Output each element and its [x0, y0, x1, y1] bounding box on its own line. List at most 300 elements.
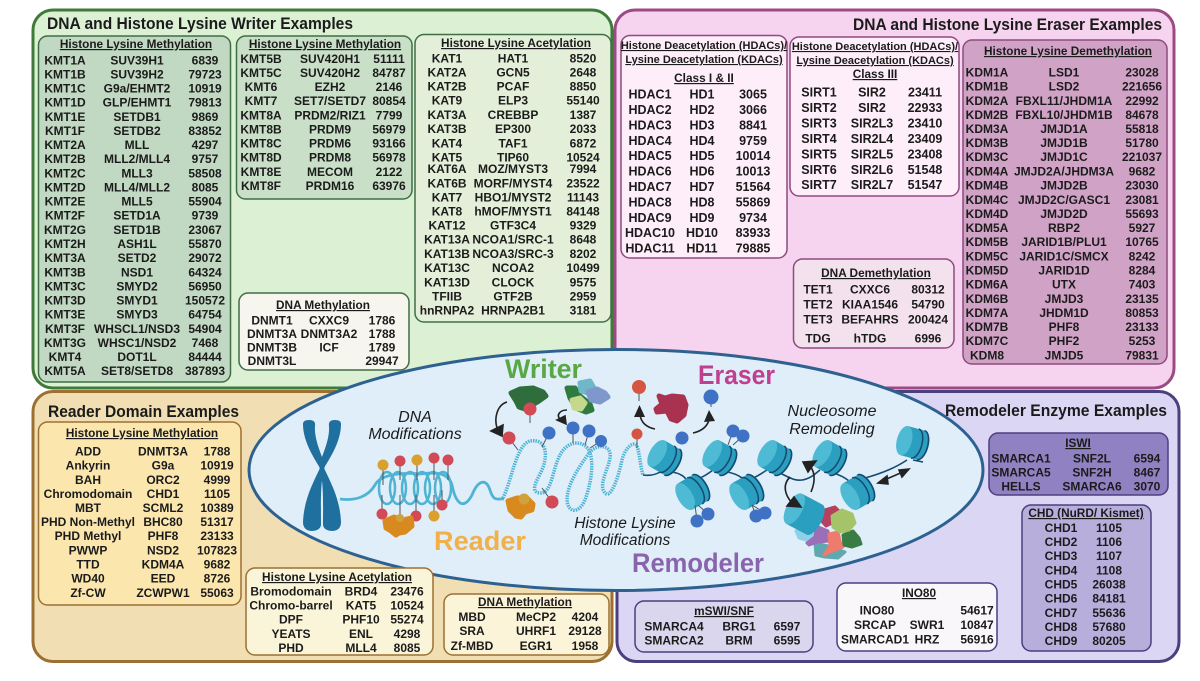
table: histone lysine demethylation: FBXL11/JHDM1A	[1016, 94, 1113, 108]
table: HDAC class III: 51548	[908, 163, 942, 177]
table: reader histone lysine acetylation: Chromo-barrel	[249, 598, 333, 612]
table: histone lysine methylation 1: WHSCL1/NSD3	[94, 322, 180, 336]
table: HDAC class I and II: HDAC5	[628, 149, 672, 163]
table: mSWI/SNF: mSWI/SNF	[694, 604, 754, 618]
table: histone lysine methylation 1: 55904	[188, 195, 222, 209]
table: HDAC class I and II: HD5	[689, 149, 715, 163]
table: HDAC class III: SIR2L7	[851, 178, 893, 192]
table: histone lysine methylation 1: 84444	[188, 350, 222, 364]
table: mSWI/SNF: 6595	[774, 634, 801, 648]
heading: reader: Reader Domain Examples	[48, 402, 239, 421]
table: histone lysine methylation 1: KMT2E	[45, 195, 85, 209]
table: histone lysine demethylation: 55693	[1125, 207, 1159, 221]
icon: remodeler complex	[779, 490, 861, 558]
table: HDAC class III: 51547	[908, 178, 942, 192]
table: mSWI/SNF: BRM	[725, 634, 753, 648]
panel: reader examples	[33, 392, 612, 662]
table: HDAC class III: 23411	[908, 86, 942, 100]
table: histone lysine acetylation writer: 10499	[566, 261, 600, 275]
table: histone lysine methylation 2: 63976	[372, 179, 406, 193]
table: HDAC class III: SIRT3	[801, 116, 837, 130]
table: DNA methylation writer: 1788	[369, 327, 396, 341]
table: histone lysine methylation 2: 56978	[372, 151, 406, 165]
table: reader DNA methylation: UHRF1	[516, 624, 556, 638]
table: histone lysine demethylation: KDM4B	[966, 178, 1009, 192]
table: reader histone lysine methylation: 51317	[200, 515, 234, 529]
table: CHD: 84181	[1092, 592, 1126, 606]
table: histone lysine acetylation writer: KAT3B	[427, 122, 467, 136]
table: histone lysine acetylation writer: KAT2A	[427, 66, 467, 80]
table: histone lysine methylation 2: KMT8E	[241, 165, 281, 179]
table: histone lysine demethylation: KDM6B	[966, 292, 1009, 306]
table: histone lysine methylation 2: KMT8C	[240, 136, 282, 150]
table: ISWI: SNF2L	[1073, 452, 1111, 466]
table: histone lysine acetylation writer: NCOA2	[492, 261, 534, 275]
table: reader histone lysine methylation: 10389	[200, 501, 234, 515]
table: DNA methylation writer: 1786	[369, 314, 396, 328]
icon: eraser protein with arrows	[632, 380, 718, 433]
table: histone lysine demethylation: JHDM1D	[1039, 306, 1089, 320]
table: HDAC class I and II: HDAC6	[628, 164, 672, 178]
table: histone lysine demethylation: KDM2A	[966, 94, 1009, 108]
table: INO80: 56916	[960, 632, 994, 646]
table: CHD: CHD1	[1045, 521, 1078, 535]
table: DNA demethylation: TET3	[803, 312, 833, 326]
table: reader histone lysine methylation: 1105	[204, 487, 230, 501]
table: HDAC class I and II: HDAC8	[628, 196, 672, 210]
table: HDAC class I and II: 3065	[739, 88, 767, 102]
table: histone lysine demethylation: JMJD1B	[1040, 136, 1088, 150]
table: reader histone lysine acetylation: 8085	[394, 641, 421, 655]
icon: nucleosome chain	[643, 424, 932, 513]
table: histone lysine acetylation writer: KAT8	[432, 204, 463, 218]
table: INO80: SWR1	[910, 618, 945, 632]
table: DNA demethylation: KIAA1546	[842, 298, 898, 312]
heading: writer: DNA and Histone Lysine Writer Examples	[47, 14, 353, 33]
table: histone lysine acetylation writer: CREBBP	[488, 108, 538, 122]
table: HDAC class I and II: Lysine Deacetylation (KDACs)	[625, 54, 783, 66]
table: histone lysine methylation 1: SETD1B	[113, 223, 161, 237]
table: histone lysine methylation 1: KMT3C	[44, 279, 86, 293]
label: nucleosome remodeling: Nucleosome	[788, 403, 877, 420]
table: histone lysine acetylation writer: 3181	[570, 304, 597, 318]
table: HDAC class III: Class III	[853, 67, 897, 81]
table: histone lysine methylation 2: 84787	[372, 66, 406, 80]
table: reader histone lysine methylation: 55063	[200, 586, 234, 600]
table: histone lysine acetylation writer: 2033	[570, 122, 597, 136]
table: histone lysine methylation 1: 8085	[192, 180, 219, 194]
table: CHD: 1107	[1096, 549, 1122, 563]
table: histone lysine methylation 1: ASH1L	[117, 237, 157, 251]
table: HDAC class I and II: HDAC9	[628, 211, 672, 225]
table: HDAC class I and II: HD9	[689, 211, 715, 225]
table: histone lysine methylation 1: GLP/EHMT1	[103, 96, 172, 110]
table: reader histone lysine acetylation: 23476	[390, 584, 424, 598]
table: HDAC class I and II: HDAC2	[628, 103, 672, 117]
table: histone lysine methylation 1: SETDB1	[113, 110, 161, 124]
label: writer: Writer	[505, 354, 582, 384]
table: histone lysine demethylation: 5927	[1129, 221, 1156, 235]
table: histone lysine methylation 2: PRDM6	[309, 136, 351, 150]
table: histone lysine methylation 2: KMT8B	[240, 122, 282, 136]
table: reader histone lysine methylation: ADD	[75, 444, 101, 458]
table: histone lysine demethylation: JMJD2D	[1040, 207, 1088, 221]
table: histone lysine methylation 1: KMT2H	[44, 237, 86, 251]
table: histone lysine methylation 1	[38, 36, 230, 382]
table: histone lysine methylation 1: 10919	[188, 82, 222, 96]
table: DNA methylation writer: 29947	[365, 354, 399, 368]
table: histone lysine methylation 1: SET8/SETD8	[101, 364, 173, 378]
table: histone lysine acetylation writer: KAT5	[432, 150, 463, 164]
table: histone lysine acetylation writer: Histone Lysine Acetylation	[441, 36, 591, 50]
table: histone lysine demethylation: LSD2	[1049, 80, 1080, 94]
table: reader histone lysine acetylation: BRD4	[345, 584, 378, 598]
table: histone lysine acetylation writer: 2648	[570, 66, 597, 80]
table: histone lysine methylation 1: KMT3D	[44, 294, 86, 308]
table: mSWI/SNF: SMARCA2	[644, 634, 704, 648]
table: CHD	[1022, 505, 1151, 651]
table: histone lysine methylation 1: SUV39H2	[110, 67, 164, 81]
table: CHD: CHD4	[1045, 564, 1078, 578]
table: histone lysine methylation 2: 93166	[372, 136, 406, 150]
table: HDAC class III: SIR2	[858, 101, 886, 115]
table: ISWI	[989, 433, 1168, 495]
table: reader DNA methylation: Zf-MBD	[451, 639, 494, 653]
table: reader histone lysine methylation: KDM4A	[142, 558, 185, 572]
table: histone lysine demethylation: KDM3C	[966, 150, 1009, 164]
table: histone lysine methylation 1: 23067	[188, 223, 222, 237]
table: histone lysine methylation 2: KMT5C	[240, 66, 282, 80]
table: HDAC class III: SIRT6	[801, 163, 837, 177]
table: HDAC class III: SIR2L5	[851, 148, 893, 162]
table: reader histone lysine methylation: 4999	[204, 473, 231, 487]
table: histone lysine demethylation: 22992	[1125, 94, 1159, 108]
table: ISWI: SNF2H	[1072, 466, 1112, 480]
icon: chromosome	[303, 420, 341, 531]
table: histone lysine methylation 1: 387893	[185, 364, 225, 378]
table: reader histone lysine methylation: PHD Non-Methyl	[41, 515, 135, 529]
table: histone lysine acetylation writer: 55140	[566, 94, 600, 108]
table: histone lysine acetylation writer: EP300	[495, 122, 531, 136]
table: CHD: CHD8	[1045, 620, 1078, 634]
table: histone lysine acetylation writer: ELP3	[498, 94, 528, 108]
table: histone lysine acetylation writer: TAF1	[498, 136, 528, 150]
table: histone lysine demethylation: RBP2	[1048, 221, 1080, 235]
label: DNA modifications	[368, 409, 462, 443]
table: histone lysine methylation 1: KMT2F	[45, 209, 85, 223]
table: histone lysine demethylation: 8284	[1129, 264, 1156, 278]
table: histone lysine demethylation: 23030	[1125, 178, 1159, 192]
table: histone lysine acetylation writer: KAT2B	[427, 80, 467, 94]
label: histone lysine modifications: Histone Lysine	[574, 515, 676, 532]
table: histone lysine methylation 2: KMT7	[245, 94, 278, 108]
table: histone lysine demethylation: JMJD2B	[1040, 178, 1088, 192]
table: histone lysine methylation 1: 58508	[188, 166, 222, 180]
table: histone lysine acetylation writer: 8520	[570, 52, 597, 66]
table: histone lysine demethylation: KDM7B	[966, 320, 1009, 334]
label: nucleosome remodeling	[788, 403, 877, 438]
table: histone lysine methylation 1: SMYD1	[116, 294, 158, 308]
table: reader histone lysine methylation: G9a	[152, 458, 175, 472]
table: histone lysine acetylation writer: MOZ/MYST3	[478, 162, 548, 176]
table: INO80: INO80	[902, 586, 936, 600]
panel: remodeler examples	[617, 392, 1179, 662]
table: INO80: SMARCAD1	[841, 632, 909, 646]
table: ISWI: ISWI	[1065, 436, 1091, 450]
table: DNA demethylation: TDG	[805, 332, 831, 346]
table: CHD: 80205	[1092, 634, 1126, 648]
table: ISWI: 3070	[1134, 480, 1161, 494]
table: histone lysine methylation 1: 9869	[192, 110, 219, 124]
table: histone lysine demethylation: JMJD2A/JHDM3A	[1014, 164, 1114, 178]
table: HDAC class III: 22933	[908, 101, 942, 115]
table: reader histone lysine acetylation: PHD	[278, 641, 304, 655]
table: reader histone lysine acetylation: MLL4	[345, 641, 377, 655]
table: INO80: SRCAP	[854, 618, 896, 632]
table: HDAC class I and II: HD6	[689, 164, 715, 178]
table: ISWI: 8467	[1134, 466, 1161, 480]
table: reader histone lysine acetylation: YEATS	[271, 627, 311, 641]
table: histone lysine methylation 1: SETD1A	[113, 209, 161, 223]
table: histone lysine methylation 1: 7468	[192, 336, 219, 350]
label: histone lysine modifications: Modifications	[580, 532, 670, 549]
table: reader histone lysine acetylation: 4298	[394, 627, 421, 641]
table: histone lysine methylation 1: 64324	[188, 265, 222, 279]
table: histone lysine acetylation writer: GTF2B	[493, 290, 533, 304]
table: histone lysine acetylation writer: 8648	[570, 232, 597, 246]
table: histone lysine methylation 2: 51111	[373, 52, 405, 66]
table: reader DNA methylation: MBD	[458, 610, 486, 624]
table: histone lysine demethylation: PHF2	[1049, 334, 1080, 348]
table: histone lysine methylation 1: 55870	[188, 237, 222, 251]
table: DNA methylation writer: DNMT3B	[247, 340, 297, 354]
table: histone lysine methylation 1: KMT3B	[44, 265, 86, 279]
table: HDAC class I and II: HDAC10	[625, 226, 675, 240]
table: DNA demethylation: CXXC6	[850, 282, 890, 296]
table: reader histone lysine methylation: 23133	[200, 529, 234, 543]
table: histone lysine demethylation: JMJD1C	[1040, 150, 1088, 164]
table: ISWI: SMARCA1	[991, 452, 1051, 466]
table: mSWI/SNF: SMARCA4	[644, 620, 704, 634]
table: histone lysine demethylation: 10765	[1125, 235, 1159, 249]
table: reader histone lysine methylation: ORC2	[146, 473, 180, 487]
table: histone lysine methylation 2: 2122	[376, 165, 403, 179]
table: reader histone lysine methylation: Chromodomain	[44, 487, 132, 501]
table: DNA demethylation: 54790	[911, 298, 945, 312]
table: HDAC class I and II: HDAC7	[628, 180, 672, 194]
table: histone lysine demethylation: 84678	[1125, 108, 1159, 122]
table: reader histone lysine methylation: 8726	[204, 572, 231, 586]
table: histone lysine demethylation: KDM3A	[966, 122, 1009, 136]
table: DNA demethylation	[794, 259, 954, 348]
table: histone lysine acetylation writer: KAT9	[432, 94, 463, 108]
table: histone lysine methylation 2: PRDM8	[309, 151, 351, 165]
table: INO80	[837, 583, 997, 651]
table: histone lysine demethylation: 9682	[1129, 164, 1156, 178]
icon: histone modification pins	[502, 422, 607, 508]
table: histone lysine demethylation: KDM4C	[966, 193, 1009, 207]
table: DNA demethylation: BEFAHRS	[841, 312, 899, 326]
table: histone lysine demethylation: 23135	[1125, 292, 1159, 306]
ellipse background	[249, 350, 983, 590]
table: histone lysine acetylation writer: KAT13A	[424, 232, 470, 246]
table: INO80: INO80	[860, 604, 895, 618]
table: histone lysine demethylation: JMJD3	[1045, 292, 1084, 306]
table: histone lysine acetylation writer: hMOF/MYST1	[474, 204, 552, 218]
table: CHD: CHD9	[1045, 634, 1078, 648]
table: HDAC class I and II: HDAC1	[628, 88, 672, 102]
table: histone lysine methylation 2: 80854	[372, 94, 406, 108]
table: reader DNA methylation	[444, 594, 609, 655]
table: reader histone lysine acetylation: DPF	[279, 612, 303, 626]
table: histone lysine methylation 1: 29072	[188, 251, 222, 265]
table: reader DNA methylation: EGR1	[520, 639, 553, 653]
table: histone lysine demethylation: KDM5B	[966, 235, 1009, 249]
table: histone lysine methylation 2: 56979	[372, 122, 406, 136]
table: histone lysine methylation 2: SET7/SETD7	[294, 94, 366, 108]
table: histone lysine methylation 2: SUV420H1	[300, 52, 360, 66]
table: CHD: 1108	[1096, 564, 1122, 578]
table: CHD: 26038	[1092, 578, 1126, 592]
table: HDAC class III: 23408	[908, 148, 942, 162]
icon: DNA fiber and coil	[340, 441, 643, 510]
icon: DNA modification pins	[376, 452, 454, 522]
icon: histone lysine pins on nucleosomes	[632, 424, 772, 528]
table: histone lysine demethylation: KDM6A	[966, 278, 1009, 292]
table: histone lysine acetylation writer: TFIIB	[432, 290, 462, 304]
table: histone lysine methylation 2: 7799	[376, 108, 403, 122]
table: histone lysine demethylation: JMJD2C/GASC1	[1018, 193, 1110, 207]
table: histone lysine methylation 1: 9757	[192, 152, 219, 166]
table: histone lysine demethylation: KDM1A	[966, 66, 1009, 80]
table: histone lysine methylation 1: DOT1L	[117, 350, 157, 364]
table: reader histone lysine methylation: BAH	[75, 473, 101, 487]
label: DNA modifications: DNA	[398, 409, 432, 426]
table: reader histone lysine methylation: PHD Methyl	[55, 529, 121, 543]
table: reader histone lysine methylation	[38, 422, 241, 605]
table: histone lysine methylation 1: KMT2D	[44, 180, 86, 194]
table: histone lysine demethylation: 23028	[1125, 66, 1159, 80]
table: histone lysine acetylation writer: PCAF	[497, 80, 529, 94]
table: histone lysine demethylation: 79831	[1125, 348, 1159, 362]
table: mSWI/SNF	[635, 601, 813, 652]
panel: eraser examples	[615, 10, 1174, 388]
table: HDAC class I and II: 79885	[736, 242, 770, 256]
table: histone lysine methylation 2: KMT8D	[240, 151, 282, 165]
table: DNA methylation writer: DNA Methylation	[276, 298, 370, 312]
table: histone lysine methylation 1: MLL5	[121, 195, 153, 209]
table: histone lysine demethylation: KDM7C	[966, 334, 1009, 348]
table: histone lysine acetylation writer: 9575	[570, 276, 597, 290]
table: mSWI/SNF: BRG1	[722, 620, 756, 634]
table: histone lysine acetylation writer: 9329	[570, 218, 597, 232]
table: reader histone lysine acetylation: 55274	[390, 612, 424, 626]
table: histone lysine demethylation: 7403	[1129, 278, 1156, 292]
table: HDAC class III: SIRT2	[801, 101, 837, 115]
table: HDAC class III: SIR2	[858, 86, 886, 100]
label: histone lysine modifications	[574, 515, 676, 549]
table: histone lysine methylation 1: 54904	[188, 322, 222, 336]
table: histone lysine demethylation: 23081	[1125, 193, 1159, 207]
table: HDAC class I and II	[621, 36, 787, 258]
table: histone lysine methylation 1: MLL	[125, 138, 149, 152]
table: histone lysine acetylation writer: 84148	[566, 204, 600, 218]
table: DNA demethylation: 80312	[911, 282, 945, 296]
table: HDAC class I and II: HD2	[689, 103, 715, 117]
table: histone lysine methylation 2: SUV420H2	[300, 66, 360, 80]
table: histone lysine demethylation: KDM5A	[966, 221, 1009, 235]
table: CHD: 55636	[1092, 606, 1126, 620]
table: histone lysine methylation 1: 150572	[185, 294, 225, 308]
table: reader histone lysine methylation: 10919	[200, 458, 234, 472]
table: CHD: 1106	[1096, 535, 1122, 549]
table: CHD: CHD2	[1045, 535, 1078, 549]
table: histone lysine methylation 2: EZH2	[315, 80, 346, 94]
table: histone lysine methylation 1: KMT3G	[44, 336, 86, 350]
table: histone lysine acetylation writer: KAT13D	[424, 276, 470, 290]
table: HDAC class I and II: HD7	[689, 180, 715, 194]
table: DNA methylation writer: DNMT3A2	[301, 327, 358, 341]
table: histone lysine acetylation writer: KAT1	[432, 52, 463, 66]
table: histone lysine methylation 1: SUV39H1	[110, 53, 164, 67]
central illustration	[249, 350, 983, 590]
table: histone lysine demethylation: KDM2B	[966, 108, 1009, 122]
table: histone lysine acetylation writer: KAT4	[432, 136, 463, 150]
table: DNA methylation writer: DNMT3L	[248, 354, 296, 368]
heading: eraser: DNA and Histone Lysine Eraser Examples	[853, 15, 1162, 34]
table: HDAC class I and II: 10014	[736, 149, 770, 163]
table: DNA demethylation: hTDG	[854, 332, 886, 346]
table: histone lysine methylation 1: KMT2G	[44, 223, 86, 237]
table: histone lysine methylation 2: Histone Lysine Methylation	[249, 37, 401, 51]
table: histone lysine demethylation: JARID1C/SMCX	[1019, 250, 1109, 264]
table: ISWI: SMARCA5	[991, 466, 1051, 480]
table: reader histone lysine methylation: 1788	[204, 444, 231, 458]
table: HDAC class I and II: 9734	[739, 211, 767, 225]
table: histone lysine methylation 2: PRDM2/RIZ1	[294, 108, 366, 122]
table: HDAC class III: SIR2L3	[851, 116, 893, 130]
table: histone lysine methylation 1: KMT5A	[44, 364, 86, 378]
table: histone lysine methylation 2	[236, 36, 412, 199]
table: histone lysine demethylation: KDM5C	[966, 250, 1009, 264]
table: histone lysine acetylation writer: HBO1/MYST2	[475, 190, 552, 204]
table: histone lysine methylation 1: KMT4	[49, 350, 82, 364]
table: ISWI: 6594	[1134, 452, 1161, 466]
table: reader histone lysine methylation: WD40	[71, 572, 105, 586]
table: histone lysine acetylation writer: 11143	[567, 190, 599, 204]
table: reader histone lysine methylation: EED	[151, 572, 176, 586]
table: histone lysine demethylation: 5253	[1129, 334, 1156, 348]
table: histone lysine acetylation writer	[415, 34, 611, 322]
table: CHD: CHD5	[1045, 578, 1078, 592]
table: HDAC class I and II: Class I & II	[674, 71, 734, 85]
table: reader histone lysine acetylation: Bromodomain	[250, 584, 332, 598]
table: reader DNA methylation: SRA	[459, 624, 485, 638]
table: histone lysine methylation 2: MECOM	[307, 165, 353, 179]
table: HDAC class III: SIRT5	[801, 148, 837, 162]
table: histone lysine methylation 1: KMT1B	[44, 67, 86, 81]
table: histone lysine acetylation writer: KAT6B	[427, 176, 467, 190]
table: histone lysine methylation 2: KMT8A	[240, 108, 282, 122]
table: histone lysine demethylation: 55818	[1125, 122, 1159, 136]
table: reader histone lysine acetylation	[246, 568, 433, 655]
table: histone lysine methylation 1: MLL2/MLL4	[104, 152, 170, 166]
table: histone lysine methylation 1: SETD2	[118, 251, 157, 265]
table: histone lysine demethylation: KDM5D	[966, 264, 1009, 278]
table: histone lysine acetylation writer: HRNPA2B1	[481, 304, 545, 318]
table: CHD: 1105	[1096, 521, 1122, 535]
table: histone lysine acetylation writer: KAT3A	[427, 108, 467, 122]
